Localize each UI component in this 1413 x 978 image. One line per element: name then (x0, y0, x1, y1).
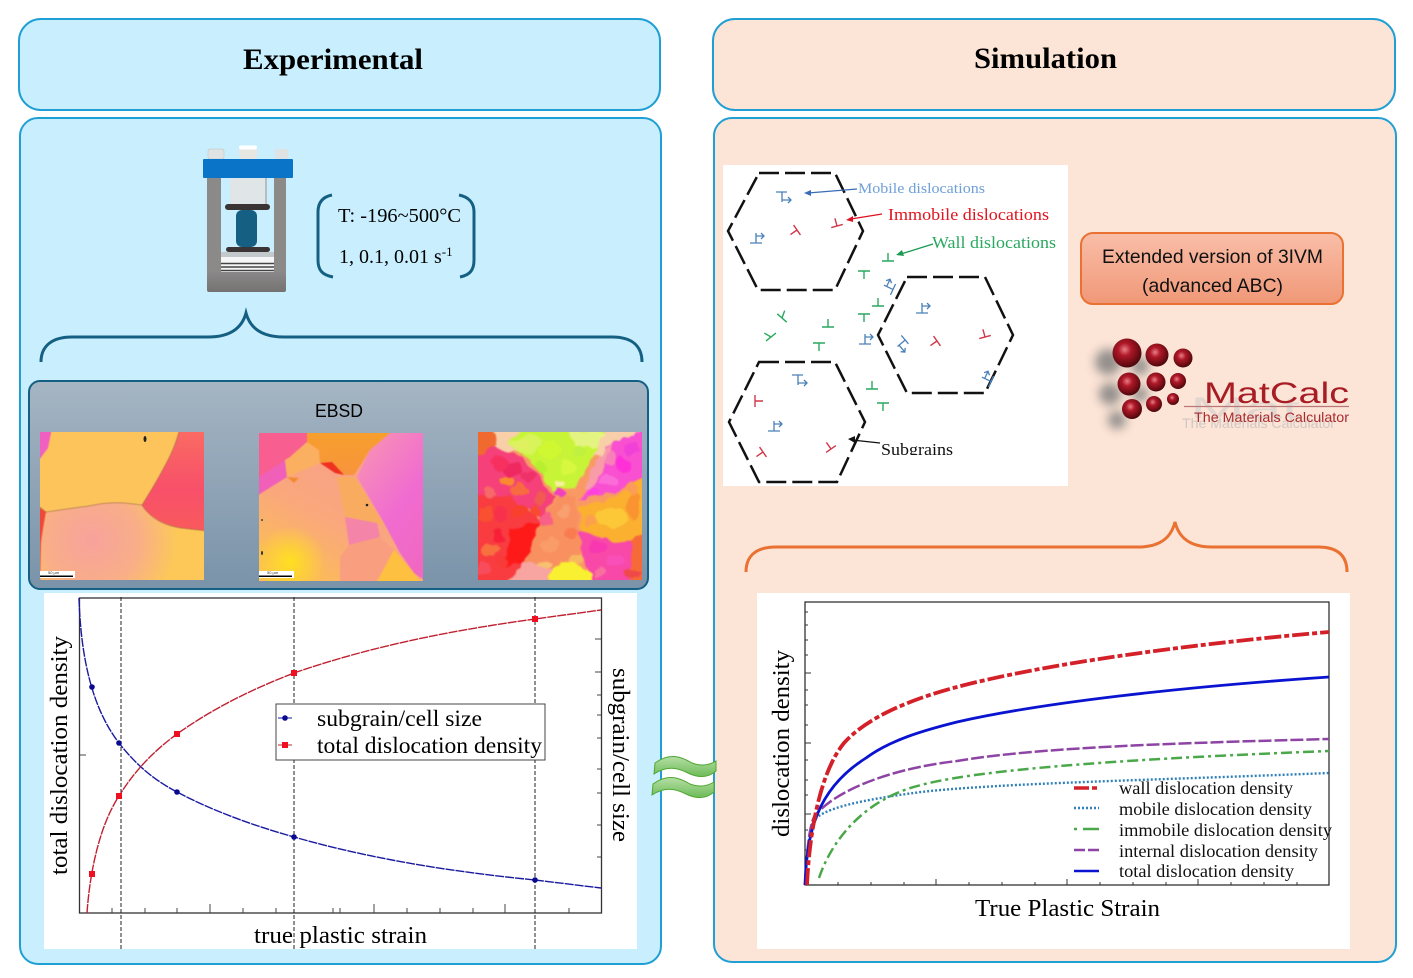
panel: EBSD (29, 381, 650, 589)
axis label: total dislocation density: total dislocation density (47, 636, 73, 875)
box: extended version of 3IVM: Extended version of 3IVM (1102, 246, 1323, 268)
callout: mobile dislocations (804, 181, 985, 197)
immobile dislocations (753, 217, 991, 462)
EBSD map 1 (36, 428, 208, 584)
panel: experimental header (19, 19, 660, 110)
heading: Experimental: Experimental (243, 43, 423, 76)
legend: wall dislocation density (1119, 778, 1293, 798)
EBSD label: EBSD (315, 401, 363, 421)
curve: internal dislocation density (805, 739, 1329, 885)
test conditions with brackets: T: -196~500°C (338, 205, 461, 227)
EBSD map 2: 50 µm (267, 570, 279, 575)
box: extended version of 3IVM (1081, 233, 1343, 304)
curve: total dislocation density (87, 610, 601, 913)
callout: immobile dislocations: Immobile dislocations (888, 205, 1049, 224)
legend: internal dislocation density (1119, 841, 1318, 861)
data points: total dislocation density (89, 616, 538, 877)
panel: simulation body (714, 118, 1396, 962)
callout: subgrains (848, 436, 952, 455)
legend: total dislocation density (317, 733, 543, 758)
test conditions with brackets (318, 195, 474, 277)
EBSD map 3 (478, 432, 642, 580)
icon: approximately equal sign (652, 756, 716, 798)
test conditions with brackets: 1, 0.1, 0.01 s (339, 246, 442, 268)
legend: subgrain/cell size (317, 706, 482, 731)
callout: wall dislocations (896, 233, 1056, 256)
data points: subgrain/cell size (89, 684, 538, 883)
chart: dislocation density vs strain (757, 593, 1350, 949)
axis label: True Plastic Strain: True Plastic Strain (975, 896, 1160, 922)
callout: wall dislocations: Wall dislocations (932, 233, 1056, 252)
logo: MatCalc: Mat (1190, 392, 1301, 425)
heading: Simulation: Simulation (974, 42, 1117, 75)
logo: MatCalc (1095, 338, 1349, 431)
legend: total dislocation density (1119, 861, 1294, 881)
legend (276, 704, 545, 760)
EBSD map 2 (255, 429, 427, 585)
chart: subgrain size and dislocation density vs strain (44, 593, 637, 949)
curve: wall dislocation density (807, 632, 1329, 885)
curve: mobile dislocation density (805, 773, 1329, 885)
icon: compression test machine (203, 146, 293, 292)
logo: MatCalc: MatCalc (1204, 377, 1349, 410)
axis label: true plastic strain: true plastic strain (254, 923, 427, 949)
callout: mobile dislocations: Mobile dislocations (858, 181, 985, 197)
curve: total dislocation density (805, 677, 1329, 885)
diagram: subgrains and dislocations (723, 165, 1068, 486)
curve: immobile dislocation density (819, 751, 1329, 878)
brace: experimental (41, 313, 642, 362)
axis label: dislocation density: dislocation density (769, 650, 795, 837)
wall dislocations (763, 253, 894, 411)
EBSD map 1: 50 µm (48, 570, 60, 575)
subgrain hexagons (728, 173, 1013, 482)
legend: mobile dislocation density (1119, 799, 1312, 819)
legend: immobile dislocation density (1119, 820, 1332, 840)
axis label: subgrain/cell size: subgrain/cell size (607, 668, 633, 842)
panel: experimental body (20, 118, 661, 964)
test conditions with brackets: -1 (442, 244, 453, 259)
box: extended version of 3IVM: (advanced ABC) (1142, 275, 1283, 297)
brace: simulation (746, 522, 1347, 572)
legend (1074, 778, 1332, 881)
mobile dislocations (750, 192, 994, 431)
curve: subgrain/cell size (79, 598, 601, 888)
logo: MatCalc: The Materials Calculator (1182, 415, 1335, 431)
callout: subgrains: Subgrains (881, 440, 953, 459)
logo: MatCalc: The Materials Calculator (1194, 409, 1349, 425)
panel: simulation header (713, 19, 1395, 110)
